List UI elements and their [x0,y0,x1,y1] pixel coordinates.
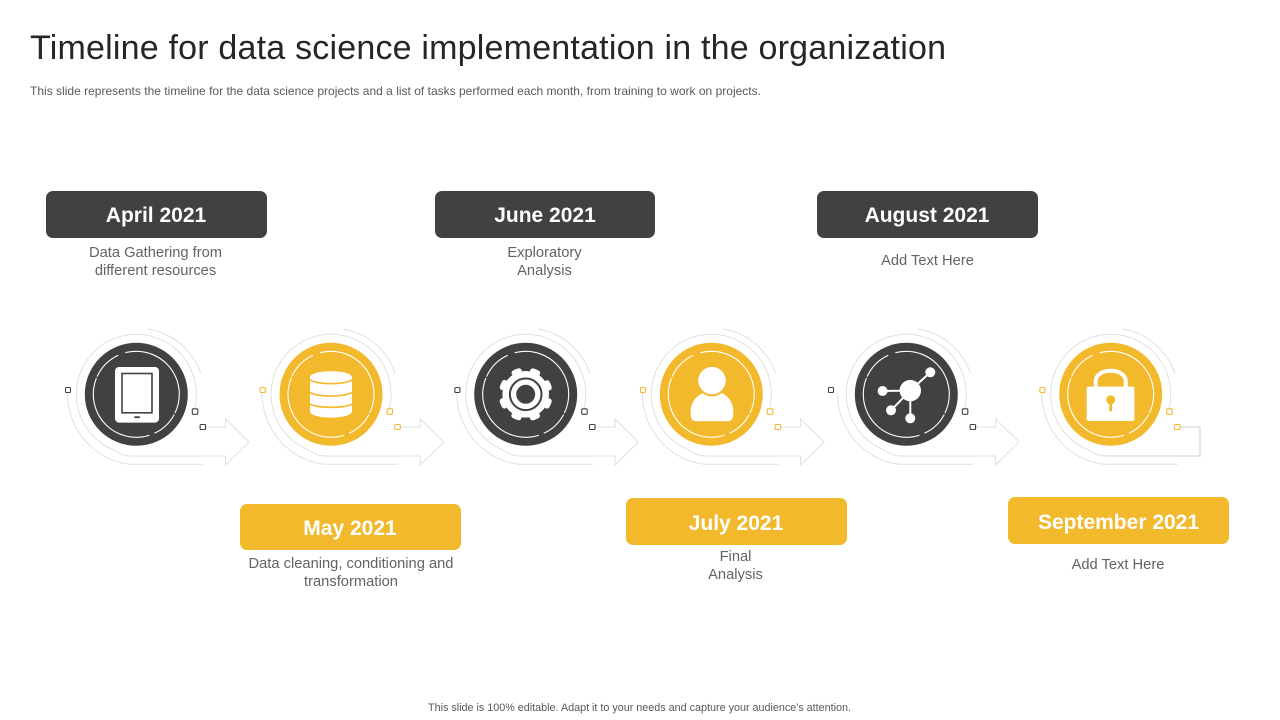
connector markers [455,388,595,430]
description: May: transformation [304,574,398,590]
description: June: Exploratory [507,245,582,261]
title: Timeline for data science implementation in the organization [30,29,946,67]
milestone: August 2021 [817,191,1038,269]
footer note: This slide is 100% editable. Adapt it to your needs and capture your audience's attention. [428,702,851,714]
milestone: September 2021 [1008,497,1229,573]
milestone: June 2021 [435,191,655,279]
label: July 2021 [626,498,847,545]
icon: tablet [115,367,159,423]
description: August: Add Text Here [881,253,974,269]
label: June 2021 [435,191,655,238]
description: July: Final [720,549,751,565]
label: June 2021: June 2021 [494,204,596,227]
label: May 2021: May 2021 [303,517,397,540]
icon: database [309,371,353,418]
milestone: July 2021 [626,498,847,583]
description: September: Add Text Here [1072,557,1164,573]
step 4: person node [640,329,824,465]
label: April 2021 [46,191,267,238]
step 5: network node [828,329,1019,465]
description: June: Analysis [517,263,572,279]
step 6: lock node [1040,329,1200,464]
connector markers [66,388,206,430]
connector markers [828,388,976,430]
icon: person [691,365,733,421]
label: August 2021 [817,191,1038,238]
label: September 2021 [1008,497,1229,544]
connector markers [640,388,781,430]
subtitle: This slide represents the timeline for the data science projects and a list of tasks performed each month, from training to work on projects. [30,84,761,98]
connector markers [260,388,400,430]
icon: padlock [1087,371,1134,421]
milestone: May 2021 [240,504,461,590]
connector markers [1040,388,1180,430]
milestone: April 2021 [46,191,267,279]
description: May: Data cleaning, conditioning and [249,556,453,572]
step 1: tablet node [66,329,249,465]
description: April: Data Gathering from [89,245,222,261]
label: May 2021 [240,504,461,550]
step 2: database node [260,329,444,465]
step 3: gear node [455,329,638,465]
description: July: Analysis [708,567,763,583]
label: April 2021: April 2021 [106,204,207,227]
label: July 2021: July 2021 [689,512,784,535]
icon: gear [496,364,556,424]
label: August 2021: August 2021 [865,204,990,227]
icon: network [878,367,935,423]
label: September 2021: September 2021 [1038,511,1199,534]
description: April: different resources [95,263,216,279]
